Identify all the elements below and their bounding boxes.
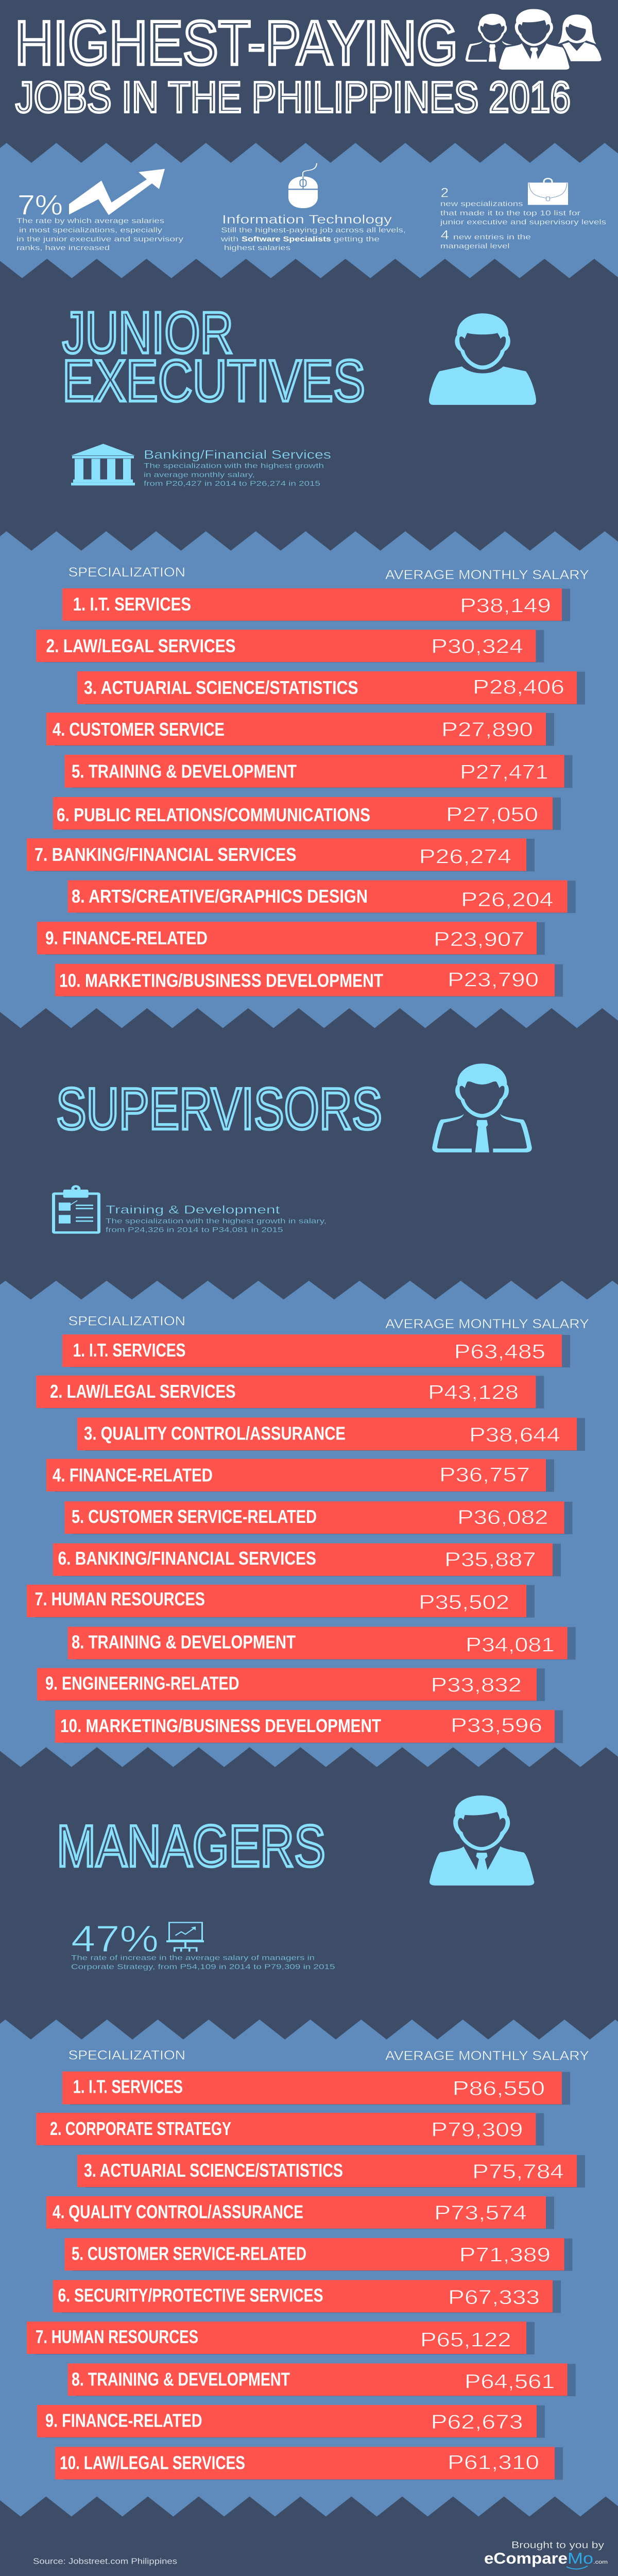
bar: Quality Control/Assurance: P73,574 [434, 2201, 527, 2224]
column heading: average monthly salary: AVERAGE MONTHLY SALARY [385, 568, 589, 582]
bar: Actuarial Science/Statistics: 3. ACTUARIAL SCIENCE/STATISTICS [84, 677, 358, 698]
bar: Arts/Creative/Graphics Design: P26,204 [461, 888, 554, 911]
text: 7% description: in the junior executive and supervisory [16, 235, 184, 243]
bar: Law/Legal Services: P61,310 [448, 2451, 539, 2473]
bar: Actuarial Science/Statistics [77, 2155, 585, 2188]
bar: Finance-Related: P36,757 [439, 1463, 530, 1486]
bar: I.T. Services [62, 2072, 570, 2105]
column heading: average monthly salary: AVERAGE MONTHLY SALARY [385, 1317, 589, 1331]
bar: Training & Development: P34,081 [466, 1633, 555, 1656]
heading: Training & Development: Training & Development [106, 1204, 280, 1216]
bar: Human Resources: P65,122 [420, 2328, 511, 2351]
bar: Training & Development [68, 1626, 576, 1659]
bar: Customer Service: 4. CUSTOMER SERVICE [53, 719, 225, 740]
icon: briefcase [528, 178, 568, 205]
heading: Banking/Financial Services: Banking/Financial Services [144, 448, 331, 462]
bar: Customer Service-Related: 5. CUSTOMER SERVICE-RELATED [72, 1506, 317, 1527]
bar: Training & Development [68, 2363, 576, 2396]
bar: Quality Control/Assurance: 4. QUALITY CONTROL/ASSURANCE [53, 2201, 303, 2223]
text: IT description: Software Specialists [242, 235, 331, 243]
bar: Marketing/Business Development: P33,596 [451, 1714, 542, 1737]
bar: Law/Legal Services [36, 630, 544, 663]
text: brought to you by: Brought to you by [511, 2539, 604, 2550]
heading: Junior Executives: EXECUTIVES [62, 348, 365, 414]
text: IT description: highest salaries [224, 244, 290, 252]
credit: eCompareMo logo [484, 2539, 608, 2569]
chart: supervisors ranking [27, 1314, 589, 1743]
text: IT description [220, 226, 406, 252]
bar: Training & Development: 5. TRAINING & DEVELOPMENT [72, 761, 297, 782]
bar: Quality Control/Assurance: P38,644 [469, 1423, 560, 1446]
text: 7% description: The rate by which average salaries [16, 217, 164, 225]
text: banking description [144, 462, 324, 488]
bar: Security/Protective Services: 6. SECURITY/PROTECTIVE SERVICES [58, 2285, 323, 2306]
text: new specializations description: new entries in the [453, 233, 531, 241]
bar: Finance-Related: 9. FINANCE-RELATED [45, 927, 208, 948]
bar: Law/Legal Services [36, 1376, 544, 1409]
heading: Junior Executives [62, 300, 365, 414]
bar: Customer Service: P27,890 [441, 718, 533, 741]
bar: I.T. Services: 1. I.T. SERVICES [73, 594, 191, 615]
bar: Customer Service [46, 713, 554, 746]
icon: three business people [466, 9, 602, 70]
bar: Human Resources: 7. HUMAN RESOURCES [36, 2327, 198, 2347]
column heading: average monthly salary: AVERAGE MONTHLY SALARY [385, 2049, 589, 2063]
icon: woman [558, 14, 602, 61]
bar: I.T. Services [62, 1334, 570, 1367]
bar: Corporate Strategy [36, 2113, 544, 2146]
bar: Law/Legal Services: 2. LAW/LEGAL SERVICES [50, 1381, 236, 1402]
bar: Finance-Related: P62,673 [431, 2410, 523, 2433]
panel: 47% Corporate Strategy [71, 1918, 335, 1971]
text: training description [106, 1217, 327, 1234]
bar: Finance-Related [46, 1459, 554, 1492]
text: new specializations description: managerial level [440, 242, 509, 250]
bar: Quality Control/Assurance [77, 1417, 585, 1451]
text: 7% description: in most specializations, especially [19, 226, 163, 234]
bar: Customer Service-Related: P36,082 [457, 1505, 548, 1529]
bar: Engineering-Related: 9. ENGINEERING-RELATED [45, 1673, 239, 1693]
chart: managers ranking [27, 2048, 589, 2480]
bar: Law/Legal Services: 10. LAW/LEGAL SERVICES [60, 2452, 245, 2473]
bar: Finance-Related: 9. FINANCE-RELATED [45, 2410, 202, 2431]
bar: Corporate Strategy: 2. CORPORATE STRATEGY [50, 2118, 231, 2139]
text: new specializations description: 2 [441, 186, 449, 200]
text: 7% description: ranks, have increased [16, 244, 110, 252]
logo wordmark: eCompare [484, 2550, 568, 2567]
bar: I.T. Services: P38,149 [460, 594, 551, 617]
text: new specializations description: that made it to the top 10 list for [440, 209, 581, 217]
bar: Engineering-Related: P33,832 [431, 1673, 522, 1696]
bar: Law/Legal Services: 2. LAW/LEGAL SERVICES [46, 636, 236, 656]
panel: Information Technology [220, 163, 406, 252]
bar: Corporate Strategy: P79,309 [431, 2118, 523, 2141]
icon: manager person [430, 1795, 534, 1886]
bar: Human Resources: P35,502 [419, 1590, 509, 1614]
text: new specializations description: junior executive and supervisory levels [440, 218, 606, 226]
bar: Public Relations/Communications [53, 797, 561, 830]
bar: Marketing/Business Development [55, 1710, 563, 1743]
panel: new specializations [440, 178, 606, 250]
bar: Quality Control/Assurance [46, 2196, 554, 2229]
heading: Junior Executives: JUNIOR [62, 300, 233, 365]
bar: Finance-Related [37, 2405, 545, 2438]
bar: Actuarial Science/Statistics [77, 671, 585, 704]
heading: Managers: MANAGERS [57, 1813, 325, 1879]
bar: Customer Service-Related: 5. CUSTOMER SERVICE-RELATED [72, 2243, 306, 2264]
bar: Finance-Related: 4. FINANCE-RELATED [53, 1465, 213, 1486]
bar: Marketing/Business Development: 10. MARKETING/BUSINESS DEVELOPMENT [59, 970, 383, 991]
bar: Finance-Related: P23,907 [434, 927, 525, 951]
text: new specializations description [440, 186, 606, 250]
text: 7% description [16, 217, 184, 252]
icon: centre man [499, 9, 570, 70]
bar: Banking/Financial Services [27, 838, 535, 871]
bar: Finance-Related [37, 922, 545, 955]
panel: Banking/Financial Services [71, 444, 331, 488]
bar: Customer Service-Related: P71,389 [459, 2243, 551, 2266]
column heading: specialization: SPECIALIZATION [68, 2048, 185, 2063]
logo domain: .com [593, 2559, 608, 2565]
text: IT description: getting the [334, 235, 380, 243]
bar: Banking/Financial Services: 7. BANKING/FINANCIAL SERVICES [35, 844, 297, 865]
bar: Banking/Financial Services: P35,887 [444, 1548, 536, 1571]
bar: Law/Legal Services [55, 2447, 563, 2480]
text: managers description: The rate of increase in the average salary of managers in [71, 1954, 315, 1962]
bar: Human Resources [27, 2321, 535, 2354]
bar: Marketing/Business Development: 10. MARKETING/BUSINESS DEVELOPMENT [60, 1716, 381, 1736]
bar: I.T. Services: 1. I.T. SERVICES [73, 1340, 186, 1361]
bar: Quality Control/Assurance: 3. QUALITY CONTROL/ASSURANCE [84, 1423, 346, 1444]
bar: I.T. Services [62, 588, 570, 621]
text: IT description: with [220, 235, 238, 243]
bar: Marketing/Business Development [55, 964, 563, 997]
text: training description: The specialization with the highest growth in salary, [106, 1217, 327, 1225]
bar: Engineering-Related [37, 1668, 545, 1701]
text: banking description: The specialization with the highest growth [144, 462, 324, 470]
icon: computer mouse [288, 163, 318, 208]
icon: rising arrow [69, 169, 165, 215]
bar: Customer Service-Related [65, 2238, 573, 2271]
bar: Training & Development [65, 755, 573, 788]
text: IT description: Still the highest-paying job across all levels, [221, 226, 406, 234]
bar: Training & Development: P64,561 [465, 2370, 555, 2393]
title: header block [15, 9, 571, 122]
text: banking description: in average monthly salary, [144, 471, 255, 479]
bar: Banking/Financial Services: 6. BANKING/FINANCIAL SERVICES [58, 1548, 316, 1569]
bar: Banking/Financial Services: P26,274 [419, 845, 511, 868]
bar: Human Resources: 7. HUMAN RESOURCES [35, 1589, 205, 1609]
stat number: 47%: 47% [71, 1918, 159, 1960]
bar: Public Relations/Communications: P27,050 [446, 803, 538, 826]
bar: Arts/Creative/Graphics Design [68, 880, 576, 913]
stat number: 7%: 7% [18, 190, 63, 221]
text: new specializations description: new specializations [440, 200, 523, 208]
bar: Training & Development: 8. TRAINING & DEVELOPMENT [72, 2369, 290, 2389]
text: training description: from P24,326 in 2014 to P34,081 in 2015 [106, 1226, 283, 1234]
bar: I.T. Services: P86,550 [452, 2077, 545, 2099]
heading: Supervisors: SUPERVISORS [56, 1076, 382, 1142]
icon: left man [466, 14, 512, 62]
heading: Information Technology: Information Technology [222, 213, 392, 226]
panel: 7% stat [16, 169, 184, 252]
column heading: specialization: SPECIALIZATION [68, 565, 185, 580]
chart: junior executives ranking [27, 565, 589, 997]
bar: Security/Protective Services [53, 2280, 561, 2313]
source note: Source: Jobstreet.com Philippines [33, 2556, 177, 2566]
icon: junior executive person [429, 313, 536, 405]
logo wordmark accent: Mo [568, 2550, 593, 2567]
bar: Training & Development: 8. TRAINING & DEVELOPMENT [72, 1632, 296, 1652]
text: new specializations description: 4 [441, 228, 449, 243]
bar: Marketing/Business Development: P23,790 [448, 968, 539, 991]
bar: Banking/Financial Services [53, 1544, 561, 1577]
logo smile [566, 2566, 588, 2569]
bar: Arts/Creative/Graphics Design: 8. ARTS/CREATIVE/GRAPHICS DESIGN [72, 886, 368, 907]
bar: Training & Development: P27,471 [460, 760, 548, 783]
bar: Actuarial Science/Statistics: P75,784 [472, 2160, 564, 2183]
bar: Security/Protective Services: P67,333 [448, 2285, 540, 2309]
icon: bank building [71, 444, 135, 485]
bar: Customer Service-Related [65, 1501, 573, 1534]
bar: Actuarial Science/Statistics: P28,406 [473, 675, 564, 698]
column heading: specialization: SPECIALIZATION [68, 1314, 185, 1328]
panel: Training & Development [54, 1185, 327, 1234]
bar: Law/Legal Services: P43,128 [428, 1381, 519, 1403]
text: managers description [71, 1954, 335, 1971]
icon: presentation chart [166, 1923, 204, 1952]
icon: clipboard checklist [54, 1185, 99, 1232]
text: banking description: from P20,427 in 2014 to P26,274 in 2015 [144, 480, 320, 488]
bar: Human Resources [27, 1585, 535, 1618]
bar: Actuarial Science/Statistics: 3. ACTUARIAL SCIENCE/STATISTICS [84, 2160, 343, 2181]
bar: Law/Legal Services: P30,324 [431, 635, 523, 657]
text: managers description: Corporate Strategy, from P54,109 in 2014 to P79,309 in 2015 [71, 1963, 335, 1971]
bar: Public Relations/Communications: 6. PUBLIC RELATIONS/COMMUNICATIONS [57, 805, 370, 825]
bar: I.T. Services: P63,485 [454, 1340, 545, 1363]
icon: supervisor person [432, 1063, 532, 1153]
bar: I.T. Services: 1. I.T. SERVICES [73, 2076, 183, 2097]
